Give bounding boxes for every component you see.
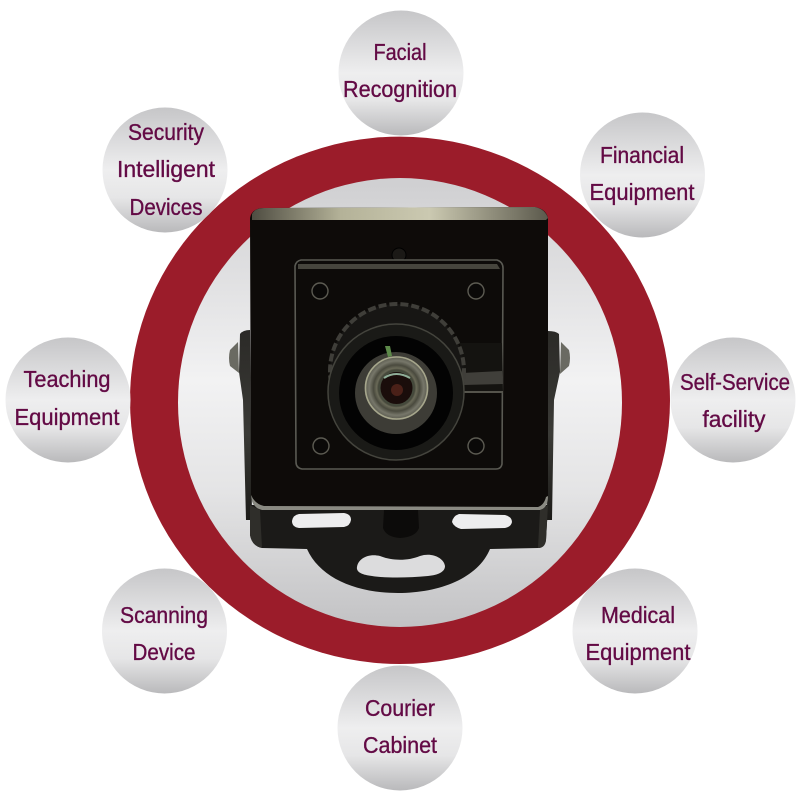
circle: Medical Equipment: Equipment bbox=[586, 639, 691, 665]
left slot bbox=[292, 513, 351, 528]
circle: Self-Service facility bbox=[670, 338, 796, 462]
hole above plate bbox=[392, 248, 406, 262]
circle: Financial Equipment: Financial bbox=[600, 142, 684, 168]
red ring bbox=[130, 137, 670, 664]
camera bbox=[229, 207, 570, 593]
circle: Courier Cabinet: Cabinet bbox=[363, 732, 438, 758]
circle: Teaching Equipment bbox=[6, 338, 130, 462]
circle: Courier Cabinet: Courier bbox=[365, 695, 435, 721]
lens holder bbox=[355, 352, 437, 434]
circle: Security Intelligent Devices bbox=[102, 108, 228, 232]
circle: Courier Cabinet bbox=[338, 666, 462, 790]
circle: Medical Equipment bbox=[572, 568, 698, 694]
circle: Medical Equipment: Medical bbox=[601, 602, 675, 628]
lens bbox=[328, 304, 464, 460]
circle: Facial Recognition bbox=[338, 10, 464, 136]
circle: Scanning Device: Device bbox=[132, 639, 196, 665]
corner screw holes bbox=[312, 283, 484, 454]
circle: Teaching Equipment: Equipment bbox=[14, 404, 120, 430]
camera body bbox=[250, 207, 548, 510]
circle: Financial Equipment bbox=[580, 112, 705, 238]
circle: Teaching Equipment: Teaching bbox=[24, 366, 110, 392]
lens glass bbox=[364, 356, 428, 420]
circle: Facial Recognition: Facial bbox=[374, 39, 426, 65]
left side bracket bbox=[229, 330, 252, 520]
circle: Facial Recognition: Recognition bbox=[343, 76, 457, 102]
curved slot bbox=[357, 555, 445, 578]
green glint bbox=[385, 346, 392, 357]
circle: Self-Service facility: facility bbox=[702, 406, 766, 432]
circle: Scanning Device bbox=[102, 568, 227, 694]
front plate bbox=[295, 260, 503, 469]
circle: Financial Equipment: Equipment bbox=[590, 179, 695, 205]
lens barrel bbox=[328, 324, 464, 460]
mounting screw bbox=[383, 510, 419, 538]
right side bracket bbox=[547, 331, 570, 520]
mounting base plate bbox=[250, 505, 548, 593]
focus ring bbox=[330, 304, 464, 438]
circle: Security Intelligent Devices: Devices bbox=[130, 194, 202, 220]
circle: Scanning Device: Scanning bbox=[120, 602, 208, 628]
right slot bbox=[452, 514, 512, 529]
plate side block bbox=[460, 343, 503, 393]
circle: Security Intelligent Devices: Security bbox=[128, 119, 204, 145]
circle: Security Intelligent Devices: Intelligent bbox=[117, 156, 216, 182]
